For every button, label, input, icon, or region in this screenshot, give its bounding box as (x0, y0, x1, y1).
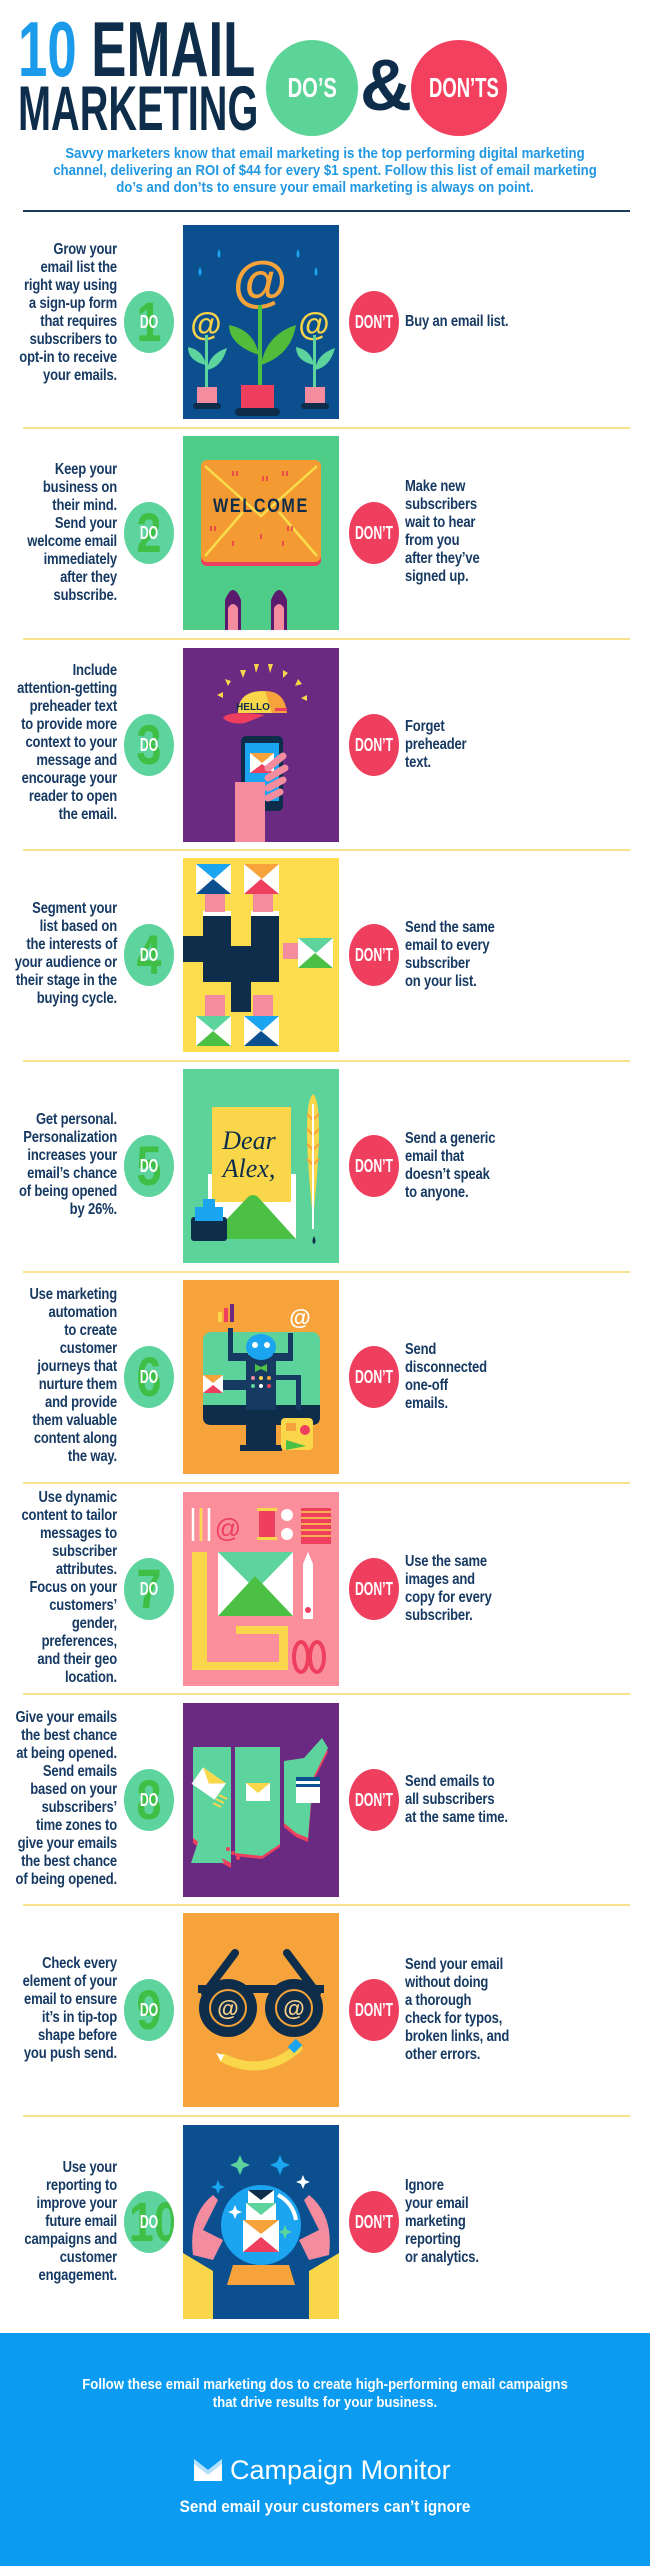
dont text 9 (405, 1956, 509, 2063)
do text 4: list based on (40, 918, 117, 935)
do badge 8 (124, 1769, 174, 1831)
do badge 6: 6 (137, 1346, 161, 1408)
dont text 10 (405, 2177, 640, 2267)
dont text 7: Use the same (405, 1553, 487, 1570)
illustration: flowers (183, 225, 339, 419)
do text 2: after they (60, 569, 117, 586)
dont badge 5 (349, 1135, 399, 1197)
dont badge 3: DON’T (355, 735, 393, 755)
do badge 6: DO (140, 1367, 158, 1387)
dont text 10: Ignore (405, 2177, 444, 2194)
do badge 8: 8 (137, 1769, 161, 1831)
do text 8 (15, 1709, 117, 1888)
dont badge 5: DON’T (355, 1156, 393, 1176)
do text 2: subscribe. (54, 587, 117, 604)
do text 8: subscribers’ (42, 1799, 117, 1816)
do text 6: journeys that (37, 1358, 117, 1375)
dont text 7: subscriber. (405, 1607, 473, 1624)
illustration: flowers: @ (298, 306, 330, 342)
do text 1: that requires (40, 313, 117, 330)
do text 8: time zones to (36, 1817, 117, 1834)
badge: DO'S: DO’S (287, 72, 337, 103)
dont badge 7: DON’T (355, 1579, 393, 1599)
illustration: welcome mat: WELCOME (213, 496, 309, 517)
do text 7: Focus on your (29, 1579, 117, 1596)
do text 10: engagement. (39, 2267, 117, 2284)
dont badge 4 (349, 924, 399, 986)
row 2 (27, 436, 480, 630)
dont badge 2: DON’T (355, 523, 393, 543)
dont text 3: preheader (405, 736, 466, 753)
dont text 7 (405, 1553, 492, 1624)
do text 6: them valuable (32, 1412, 117, 1429)
row 4 (14, 858, 495, 1052)
do text 1: email list the (40, 259, 117, 276)
intro text: do’s and don’ts to ensure your email marketing is always on point. (116, 179, 534, 196)
do text 8: based on your (30, 1781, 117, 1798)
illustration: glasses (183, 1913, 339, 2107)
do text 10: customer (60, 2249, 117, 2266)
footer text (39, 2376, 611, 2412)
dont text 4: subscriber (405, 955, 470, 972)
do text 2: business on (43, 479, 117, 496)
dont text 5: doesn’t speak (405, 1166, 490, 1183)
dont text 6: disconnected (405, 1359, 487, 1376)
dont badge 1 (349, 291, 399, 353)
dont badge 9 (349, 1979, 399, 2041)
illustration: dear alex letter: Alex, (221, 1154, 275, 1183)
do text 6: Use marketing (29, 1286, 117, 1303)
do text 9 (23, 1955, 117, 2062)
do text 5 (19, 1111, 117, 1218)
do text 7: attributes. (56, 1561, 117, 1578)
do badge 9: DO (140, 2000, 158, 2020)
tagline: Send email your customers can’t ignore (180, 2497, 470, 2516)
do text 2: Send your (55, 515, 117, 532)
do text 4: your audience or (15, 954, 117, 971)
row 8 (15, 1703, 508, 1897)
do text 7: messages to (40, 1525, 117, 1542)
dont text 2: Make new (405, 478, 465, 495)
dont text 4: on your list. (405, 973, 477, 990)
dont badge 1: DON’T (355, 312, 393, 332)
illustration: sewing kit: @ (215, 1513, 241, 1543)
dont text 7: copy for every (405, 1589, 492, 1606)
do text 4 (14, 900, 118, 1007)
dont text 8: Send emails to (405, 1773, 495, 1790)
dont badge 10: DON’T (355, 2212, 393, 2232)
illustration: hands with envelopes (183, 858, 339, 1052)
dont text 6: Send (405, 1341, 436, 1358)
dont text 9: without doing (405, 1974, 488, 1991)
do badge 3 (124, 714, 174, 776)
do text 9: Check every (42, 1955, 117, 1972)
dont text 4: email to every (405, 937, 489, 954)
dont badge 7 (349, 1558, 399, 1620)
do text 9: shape before (38, 2027, 117, 2044)
dont badge 6 (349, 1346, 399, 1408)
do text 1: Grow your (53, 241, 117, 258)
dont text 8: at the same time. (405, 1809, 508, 1826)
dont text 6 (405, 1341, 487, 1412)
badge: DO'S (266, 40, 358, 136)
dont text 2: after they’ve (405, 550, 480, 567)
do text 2 (27, 461, 117, 604)
do text 8: Give your emails (15, 1709, 117, 1726)
dont text 2: wait to hear (405, 514, 475, 531)
footer text: Follow these email marketing dos to create high-performing email campaigns (82, 2376, 568, 2393)
dont text 5: to anyone. (405, 1184, 468, 1201)
do text 5: of being opened (19, 1183, 117, 1200)
do text 3: the email. (59, 806, 117, 823)
do text 6: content along (34, 1430, 117, 1447)
dont text 2: from you (405, 532, 459, 549)
do text 2: Keep your (55, 461, 117, 478)
do text 7: and their geo (37, 1651, 117, 1668)
badge: DON'TS: DON’TS (429, 72, 499, 103)
do text 10: future email (45, 2213, 117, 2230)
do badge 5 (124, 1135, 174, 1197)
illustration: glasses: @ (283, 1996, 305, 2021)
dont text 3: Forget (405, 718, 445, 735)
do text 9: it’s in tip-top (42, 2009, 117, 2026)
title: 10 EMAIL: 10 EMAIL (18, 5, 255, 93)
row 3 (17, 648, 466, 842)
illustration: phone with hello cap (183, 648, 339, 842)
row 6 (29, 1280, 487, 1474)
do text 1: opt-in to receive (19, 349, 117, 366)
do badge 7: DO (140, 1579, 158, 1599)
do text 7: gender, (72, 1615, 117, 1632)
dont badge 10 (349, 2191, 399, 2253)
do badge 10: DO (140, 2212, 158, 2232)
row 5 (19, 1069, 496, 1263)
intro text: Savvy marketers know that email marketing is the top performing digital marketing (65, 145, 585, 162)
do text 8: the best chance (21, 1727, 117, 1744)
do text 3: Include (73, 662, 117, 679)
do text 5: email’s chance (27, 1165, 117, 1182)
do text 10 (24, 2159, 117, 2284)
do badge 4: DO (140, 945, 158, 965)
dont text 10: marketing (405, 2213, 466, 2230)
do text 2: welcome email (27, 533, 117, 550)
dont badge 2 (349, 502, 399, 564)
logo: Campaign Monitor: Campaign Monitor (230, 2455, 451, 2485)
do text 7: location. (65, 1669, 117, 1686)
dont badge 9: DON’T (355, 2000, 393, 2020)
dont text 10: or analytics. (405, 2249, 479, 2266)
do text 5: increases your (27, 1147, 117, 1164)
do badge 2 (124, 502, 174, 564)
do text 9: you push send. (24, 2045, 117, 2062)
do text 7: content to tailor (21, 1507, 117, 1524)
row 9 (23, 1913, 509, 2107)
do badge 7: 7 (137, 1558, 161, 1620)
dont text 9: check for typos, (405, 2010, 502, 2027)
do text 1: subscribers to (30, 331, 117, 348)
do text 10: improve your (37, 2195, 117, 2212)
do text 7: preferences, (42, 1633, 117, 1650)
do text 7: customers’ (49, 1597, 117, 1614)
do text 8: of being opened. (16, 1871, 117, 1888)
do text 6: customer (60, 1340, 117, 1357)
dont text 8 (405, 1773, 508, 1826)
do text 5: by 26%. (70, 1201, 117, 1218)
dont text 4: Send the same (405, 919, 495, 936)
do badge 8: DO (140, 1790, 158, 1810)
illustration: robot computer (183, 1280, 339, 1474)
dont text 2 (405, 478, 480, 585)
dont text 2: subscribers (405, 496, 477, 513)
dont text 6: emails. (405, 1395, 448, 1412)
do text 2: immediately (44, 551, 117, 568)
do text 3: preheader text (30, 698, 117, 715)
do text 8: the best chance (21, 1853, 117, 1870)
title: MARKETING: MARKETING (18, 74, 258, 144)
do badge 1 (124, 291, 174, 353)
dont text 5: Send a generic (405, 1130, 495, 1147)
do badge 5: DO (140, 1156, 158, 1176)
illustration: robot computer: @ (289, 1305, 311, 1330)
do text 3: message and (36, 752, 117, 769)
dont text 6: one-off (405, 1377, 448, 1394)
illustration: phone with hello cap: HELLO (236, 702, 270, 713)
row 10 (24, 2125, 479, 2319)
do text 3: attention-getting (17, 680, 117, 697)
do badge 7 (124, 1558, 174, 1620)
do text 6: automation (49, 1304, 117, 1321)
dont text 3 (405, 718, 466, 771)
do text 1 (19, 241, 117, 384)
dont text 10: your email (405, 2195, 468, 2212)
dont text 9: broken links, and (405, 2028, 509, 2045)
dont text 9: a thorough (405, 1992, 471, 2009)
do text 6: the way. (68, 1448, 117, 1465)
dont badge 3 (349, 714, 399, 776)
ampersand: & (360, 46, 412, 126)
dont text 4 (405, 919, 495, 990)
do badge 2: DO (140, 523, 158, 543)
do badge 9: 9 (137, 1979, 161, 2041)
do text 1: your emails. (43, 367, 117, 384)
dont text 8: all subscribers (405, 1791, 494, 1808)
do badge 4 (124, 924, 174, 986)
badge: DON'TS (411, 40, 507, 136)
do text 9: email to ensure (24, 1991, 117, 2008)
footer (0, 2333, 650, 2566)
do badge 3: 3 (137, 714, 161, 776)
do badge 9 (124, 1979, 174, 2041)
illustration: flowers: @ (233, 249, 287, 312)
do text 8: at being opened. (16, 1745, 117, 1762)
do text 5: Get personal. (36, 1111, 117, 1128)
footer text: that drive results for your business. (213, 2394, 437, 2411)
row 1 (19, 225, 508, 419)
do text 3: context to your (25, 734, 117, 751)
do text 6 (29, 1286, 118, 1465)
do badge 1: 1 (137, 291, 161, 353)
illustration: sewing kit (183, 1492, 339, 1686)
dont badge 8 (349, 1769, 399, 1831)
do text 10: campaigns and (24, 2231, 117, 2248)
do text 3 (17, 662, 118, 823)
do text 1: right way using (24, 277, 117, 294)
illustration: dear alex letter: Dear (221, 1126, 277, 1155)
illustration: welcome mat (183, 436, 339, 630)
do text 3: to provide more (21, 716, 117, 733)
illustration: flowers: @ (190, 306, 222, 342)
do text 3: encourage your (22, 770, 117, 787)
do text 10: reporting to (46, 2177, 117, 2194)
do text 4: Segment your (32, 900, 117, 917)
dont badge 6: DON’T (355, 1367, 393, 1387)
do text 4: the interests of (26, 936, 117, 953)
row 7 (21, 1489, 492, 1686)
dont text 5: email that (405, 1148, 464, 1165)
do badge 2: 2 (137, 502, 161, 564)
illustration: glasses: @ (217, 1996, 239, 2021)
dont text 9: other errors. (405, 2046, 480, 2063)
do text 8: Send emails (43, 1763, 117, 1780)
do text 8: give your emails (18, 1835, 117, 1852)
dont text 9: Send your email (405, 1956, 503, 1973)
do text 6: nurture them (39, 1376, 117, 1393)
do badge 1: DO (140, 312, 158, 332)
do text 1: a sign-up form (29, 295, 117, 312)
do text 10: Use your (63, 2159, 117, 2176)
do text 7: subscriber (52, 1543, 117, 1560)
do badge 4: 4 (137, 924, 161, 986)
do badge 6 (124, 1346, 174, 1408)
do text 9: element of your (23, 1973, 117, 1990)
do text 6: and provide (45, 1394, 117, 1411)
dont text 2: signed up. (405, 568, 468, 585)
dont badge 8: DON’T (355, 1790, 393, 1810)
dont badge 4: DON’T (355, 945, 393, 965)
illustration: crystal ball (183, 2125, 339, 2319)
do text 2: their mind. (52, 497, 117, 514)
do badge 3: DO (140, 735, 158, 755)
dont text 10: reporting (405, 2231, 461, 2248)
illustration: us map (183, 1703, 339, 1897)
illustration: dear alex letter (183, 1069, 339, 1263)
dont text 1: Buy an email list. (405, 313, 508, 330)
intro text (53, 145, 597, 196)
do text 5: Personalization (23, 1129, 117, 1146)
dont text 5 (405, 1130, 496, 1201)
do text 7: Use dynamic (39, 1489, 117, 1506)
do text 7 (21, 1489, 117, 1686)
do text 3: reader to open (29, 788, 117, 805)
do text 6: to create (64, 1322, 117, 1339)
dont text 7: images and (405, 1571, 475, 1588)
intro text: channel, delivering an ROI of $44 for every $1 spent. Follow this list of email marketing (53, 162, 597, 179)
do badge 5: 5 (137, 1135, 161, 1197)
do text 4: their stage in the (16, 972, 117, 989)
dont text 3: text. (405, 754, 431, 771)
do text 4: buying cycle. (37, 990, 117, 1007)
